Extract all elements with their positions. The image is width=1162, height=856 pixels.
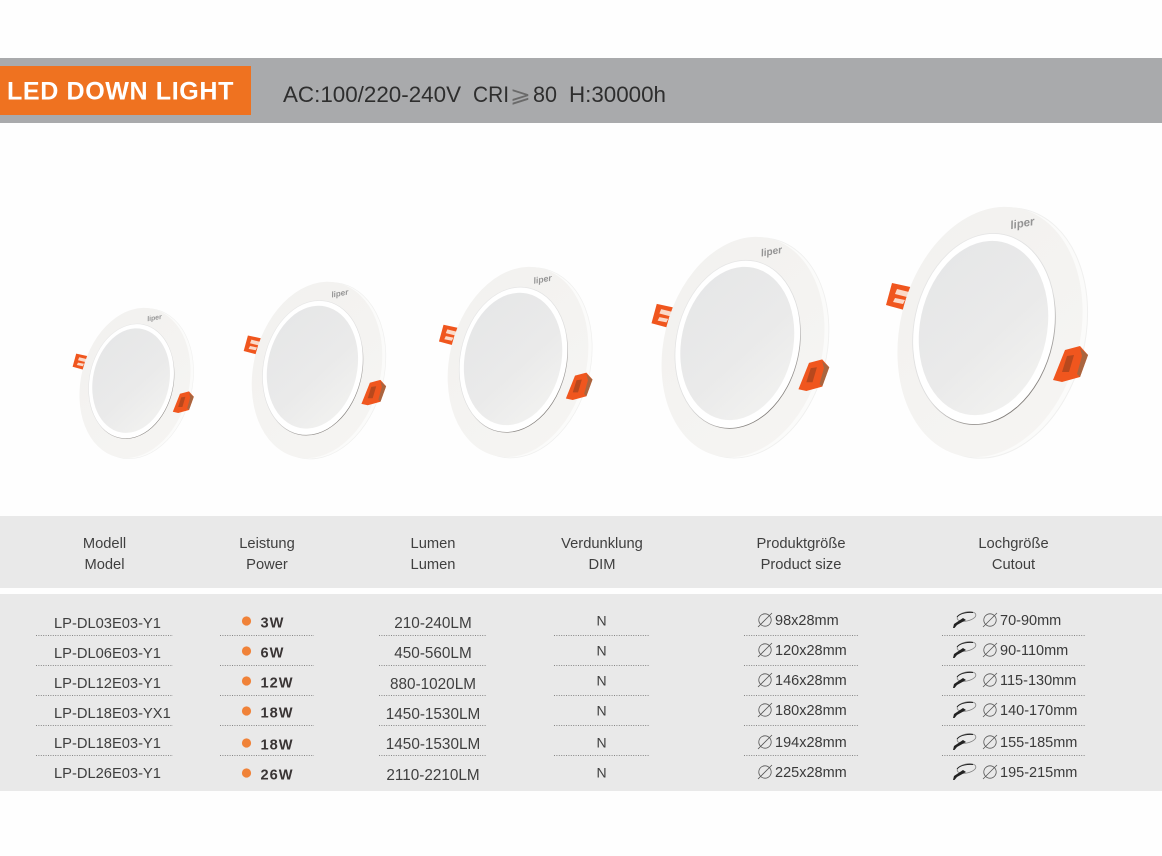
title badge bbox=[0, 66, 251, 115]
model column: LP-DL18E03-Y1 bbox=[54, 736, 161, 752]
product size column: 180x28mm bbox=[775, 703, 847, 719]
product: 18W down light: liper bbox=[760, 245, 784, 259]
model column: LP-DL12E03-Y1 bbox=[54, 676, 161, 692]
column heading: power: Power bbox=[246, 557, 288, 573]
dim column: N bbox=[596, 612, 607, 628]
lumen column: 1450-1530LM bbox=[386, 706, 480, 723]
lumen column: 2110-2210LM bbox=[386, 767, 480, 784]
specification line: AC:100/220-240V bbox=[283, 82, 461, 107]
column heading: product size: Product size bbox=[761, 557, 841, 573]
column heading: model: Model bbox=[84, 557, 125, 573]
column heading: product size: Produktgröße bbox=[756, 536, 846, 552]
model column: LP-DL06E03-Y1 bbox=[54, 646, 161, 662]
dim column: N bbox=[596, 642, 607, 658]
specification line bbox=[283, 82, 666, 108]
power column: 6W bbox=[260, 646, 284, 662]
product size column: 120x28mm bbox=[775, 643, 847, 659]
lumen column bbox=[386, 615, 480, 784]
specification line: H:30000h bbox=[569, 82, 666, 107]
power column: 18W bbox=[260, 706, 294, 722]
cutout column bbox=[953, 610, 1077, 781]
column heading: dim: Verdunklung bbox=[561, 536, 643, 552]
power column: 26W bbox=[260, 768, 294, 784]
product size column: 194x28mm bbox=[775, 735, 847, 751]
product size column: 225x28mm bbox=[775, 765, 847, 781]
table header band bbox=[0, 516, 1162, 588]
product: 3W down light bbox=[64, 296, 209, 471]
cutout column: 140-170mm bbox=[1000, 703, 1077, 719]
product: 6W down light bbox=[234, 268, 404, 473]
product: 3W down light: liper bbox=[147, 314, 163, 323]
cutout column: 195-215mm bbox=[1000, 765, 1077, 781]
product: 12W down light bbox=[428, 252, 612, 473]
model column: LP-DL18E03-YX1 bbox=[54, 706, 171, 722]
lumen column: 1450-1530LM bbox=[386, 736, 480, 753]
column heading: cutout: Lochgröße bbox=[978, 536, 1049, 552]
product size column: 146x28mm bbox=[775, 673, 847, 689]
lumen column: 210-240LM bbox=[394, 615, 472, 632]
column heading: dim: DIM bbox=[589, 557, 615, 573]
product size column bbox=[758, 613, 847, 781]
specification line: CRI bbox=[473, 82, 509, 107]
product: 6W down light: liper bbox=[331, 287, 350, 299]
header bar bbox=[0, 58, 1162, 123]
cutout column: 115-130mm bbox=[1000, 673, 1076, 689]
power column: 18W bbox=[260, 738, 294, 754]
cutout column: 70-90mm bbox=[1000, 613, 1061, 629]
column heading: model: Modell bbox=[83, 536, 126, 552]
column heading: lumen: Lumen bbox=[411, 557, 455, 573]
product: 12W down light: liper bbox=[533, 273, 553, 286]
power column: 12W bbox=[260, 676, 294, 692]
dim column bbox=[596, 612, 607, 780]
column heading: cutout: Cutout bbox=[992, 557, 1035, 573]
column heading: lumen: Lumen bbox=[411, 536, 455, 552]
dim column: N bbox=[596, 734, 607, 750]
product: 26W down light: liper bbox=[1009, 216, 1036, 232]
column heading: power: Leistung bbox=[239, 536, 295, 552]
specification line: 80 bbox=[533, 82, 557, 107]
dim column: N bbox=[596, 702, 607, 718]
title badge: LED DOWN LIGHT bbox=[7, 78, 234, 106]
power column bbox=[242, 616, 294, 784]
model column: LP-DL26E03-Y1 bbox=[54, 766, 161, 782]
lumen column: 880-1020LM bbox=[390, 676, 476, 693]
model column: LP-DL03E03-Y1 bbox=[54, 616, 161, 632]
dim column: N bbox=[596, 764, 607, 780]
lumen column: 450-560LM bbox=[394, 645, 472, 662]
product: 18W down light bbox=[639, 219, 851, 475]
power column: 3W bbox=[260, 616, 284, 632]
model column bbox=[54, 616, 171, 782]
specification line: ⩾ bbox=[510, 83, 531, 108]
product: 26W down light bbox=[872, 187, 1113, 478]
table body band bbox=[0, 594, 1162, 791]
cutout column: 155-185mm bbox=[1000, 735, 1077, 751]
cutout column: 90-110mm bbox=[1000, 643, 1068, 659]
product size column: 98x28mm bbox=[775, 613, 839, 629]
dim column: N bbox=[596, 672, 607, 688]
